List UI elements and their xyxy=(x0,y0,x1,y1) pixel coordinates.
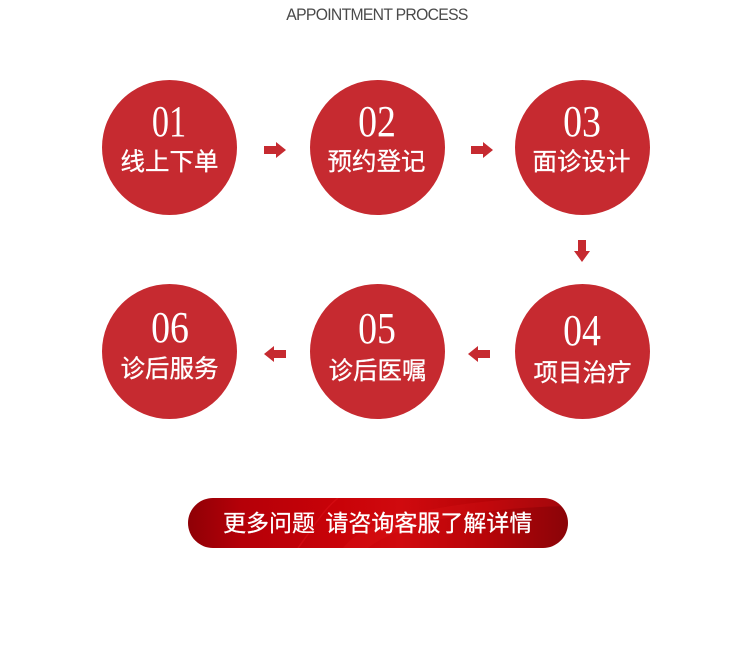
arrow: 02 to 03 xyxy=(471,142,493,158)
step 01 circle xyxy=(102,80,237,215)
step 05 label: 诊后医嘱 xyxy=(328,358,426,385)
arrow: 01 to 02 xyxy=(264,142,286,158)
arrow: 03 to 04 xyxy=(574,240,590,262)
arrow: 05 to 06 xyxy=(264,346,286,362)
step 03 circle xyxy=(515,80,650,215)
call-to-action button xyxy=(188,498,568,548)
step 06 label: 诊后服务 xyxy=(120,356,218,383)
step 01 label: 线上下单 xyxy=(120,149,218,176)
button text: 更多问题 请咨询客服了解详情 xyxy=(223,510,532,536)
step 04 circle xyxy=(515,284,650,419)
arrow: 04 to 05 xyxy=(468,346,490,362)
step 03 number: 03 xyxy=(563,97,601,146)
step 02 number: 02 xyxy=(358,97,396,146)
step 02 label: 预约登记 xyxy=(328,149,426,176)
step 03 label: 面诊设计 xyxy=(532,149,630,176)
step 04 label: 项目治疗 xyxy=(534,360,632,387)
step 05 circle xyxy=(310,284,445,419)
step 01 number: 01 xyxy=(152,97,186,146)
step 04 number: 04 xyxy=(563,306,601,355)
step 06 number: 06 xyxy=(151,303,189,352)
step 06 circle xyxy=(102,284,237,419)
step 02 circle xyxy=(310,80,445,215)
title: APPOINTMENT PROCESS xyxy=(286,5,468,24)
step 05 number: 05 xyxy=(358,304,396,353)
